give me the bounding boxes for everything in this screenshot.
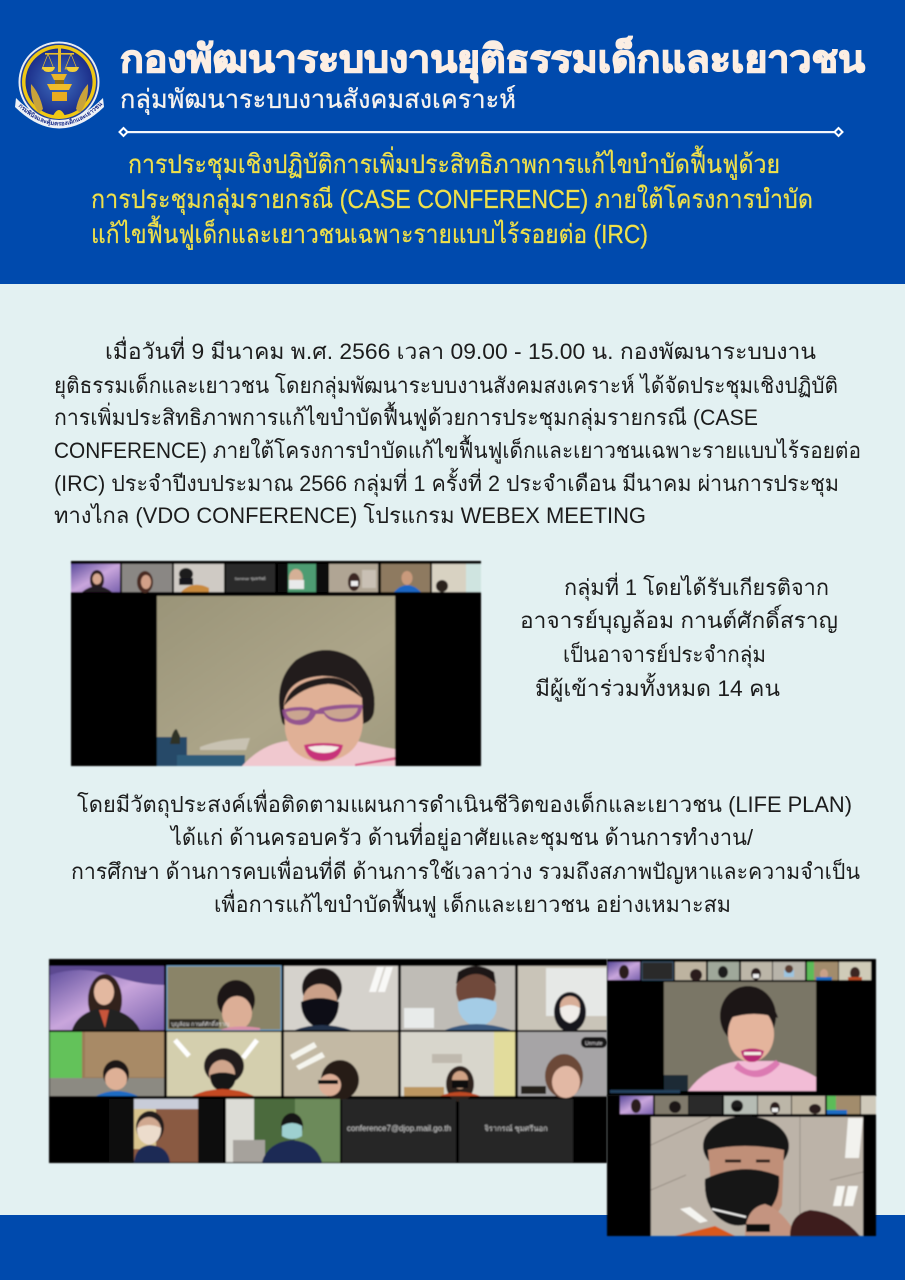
intro paragraph: ทางไกล (VDO CONFERENCE) โปรแกรม WEBEX MEETING	[54, 503, 646, 528]
bottom band	[0, 1215, 905, 1280]
objectives paragraph: เพื่อการแก้ไขบำบัดฟื้นฟู เด็กและเยาวชน อย่างเหมาะสม	[214, 889, 731, 918]
yellow heading: การประชุมกลุ่มรายกรณี (CASE CONFERENCE) ภายใต้โครงการบำบัด	[91, 184, 813, 215]
intro paragraph: เมื่อวันที่ 9 มีนาคม พ.ศ. 2566 เวลา 09.00 - 15.00 น. กองพัฒนาระบบงาน	[105, 336, 816, 364]
intro paragraph: CONFERENCE) ภายใต้โครงการบำบัดแก้ไขฟื้นฟูเด็กและเยาวชนเฉพาะรายแบบไร้รอยต่อ	[54, 435, 861, 464]
header band	[0, 0, 905, 284]
screenshot: participant gallery: บุญล้อม กานต์ศักดิ์สราญ	[171, 1020, 230, 1028]
header divider with diamond ends	[120, 128, 842, 136]
screenshot: advisor speaker view	[71, 561, 481, 766]
objectives paragraph: โดยมีวัตถุประสงค์เพื่อติดตามแผนการดำเนินชีวิตของเด็กและเยาวชน (LIFE PLAN)	[77, 789, 852, 818]
screenshot: participant gallery: conference7@djop.mail.go.th	[347, 1124, 451, 1133]
screenshot: participant gallery: Unmute	[585, 1041, 603, 1047]
advisor info text	[520, 572, 838, 702]
yellow heading	[91, 145, 813, 250]
objectives paragraph	[71, 789, 860, 918]
screenshot: advisor speaking, right top	[607, 959, 876, 1096]
advisor info text: อาจารย์บุญล้อม กานต์ศักดิ์สราญ	[520, 605, 838, 634]
screenshot: participant speaking, right bottom	[607, 1095, 876, 1236]
advisor info text: มีผู้เข้าร่วมทั้งหมด 14 คน	[535, 673, 780, 702]
intro paragraph: (IRC) ประจำปีงบประมาณ 2566 กลุ่มที่ 1 ครั้งที่ 2 ประจำเดือน มีนาคม ผ่านการประชุม	[54, 468, 839, 497]
screenshot: advisor speaker view: Seminar ชุมทรัพย์	[234, 576, 266, 582]
intro paragraph	[54, 336, 861, 528]
intro paragraph: การเพิ่มประสิทธิภาพการแก้ไขบำบัดฟื้นฟูด้วยการประชุมกลุ่มรายกรณี (CASE	[54, 402, 758, 431]
yellow heading: แก้ไขฟื้นฟูเด็กและเยาวชนเฉพาะรายแบบไร้รอยต่อ (IRC)	[91, 215, 648, 250]
screenshot: participant gallery	[49, 959, 607, 1163]
advisor info text: กลุ่มที่ 1 โดยได้รับเกียรติจาก	[564, 572, 829, 601]
icon: department seal logo	[15, 42, 104, 128]
yellow heading: การประชุมเชิงปฏิบัติการเพิ่มประสิทธิภาพการแก้ไขบำบัดฟื้นฟูด้วย	[128, 145, 780, 180]
objectives paragraph: ได้แก่ ด้านครอบครัว ด้านที่อยู่อาศัยและชุมชน ด้านการทำงาน/	[169, 822, 754, 851]
intro paragraph: ยุติธรรมเด็กและเยาวชน โดยกลุ่มพัฒนาระบบงานสังคมสงเคราะห์ ได้จัดประชุมเชิงปฏิบัติ	[54, 371, 838, 399]
title: กองพัฒนาระบบงานยุติธรรมเด็กและเยาวชน	[120, 36, 865, 83]
advisor info text: เป็นอาจารย์ประจำกลุ่ม	[563, 640, 766, 668]
subtitle: กลุ่มพัฒนาระบบงานสังคมสงเคราะห์	[120, 84, 516, 115]
icon: department seal logo: กรมพินิจและคุ้มครองเด็กและเยาวชน	[18, 102, 102, 126]
objectives paragraph: การศึกษา ด้านการคบเพื่อนที่ดี ด้านการใช้เวลาว่าง รวมถึงสภาพปัญหาและความจำเป็น	[71, 856, 860, 884]
screenshot: participant gallery: จิรากรณ์ ชุมศรีนอก	[484, 1124, 548, 1133]
